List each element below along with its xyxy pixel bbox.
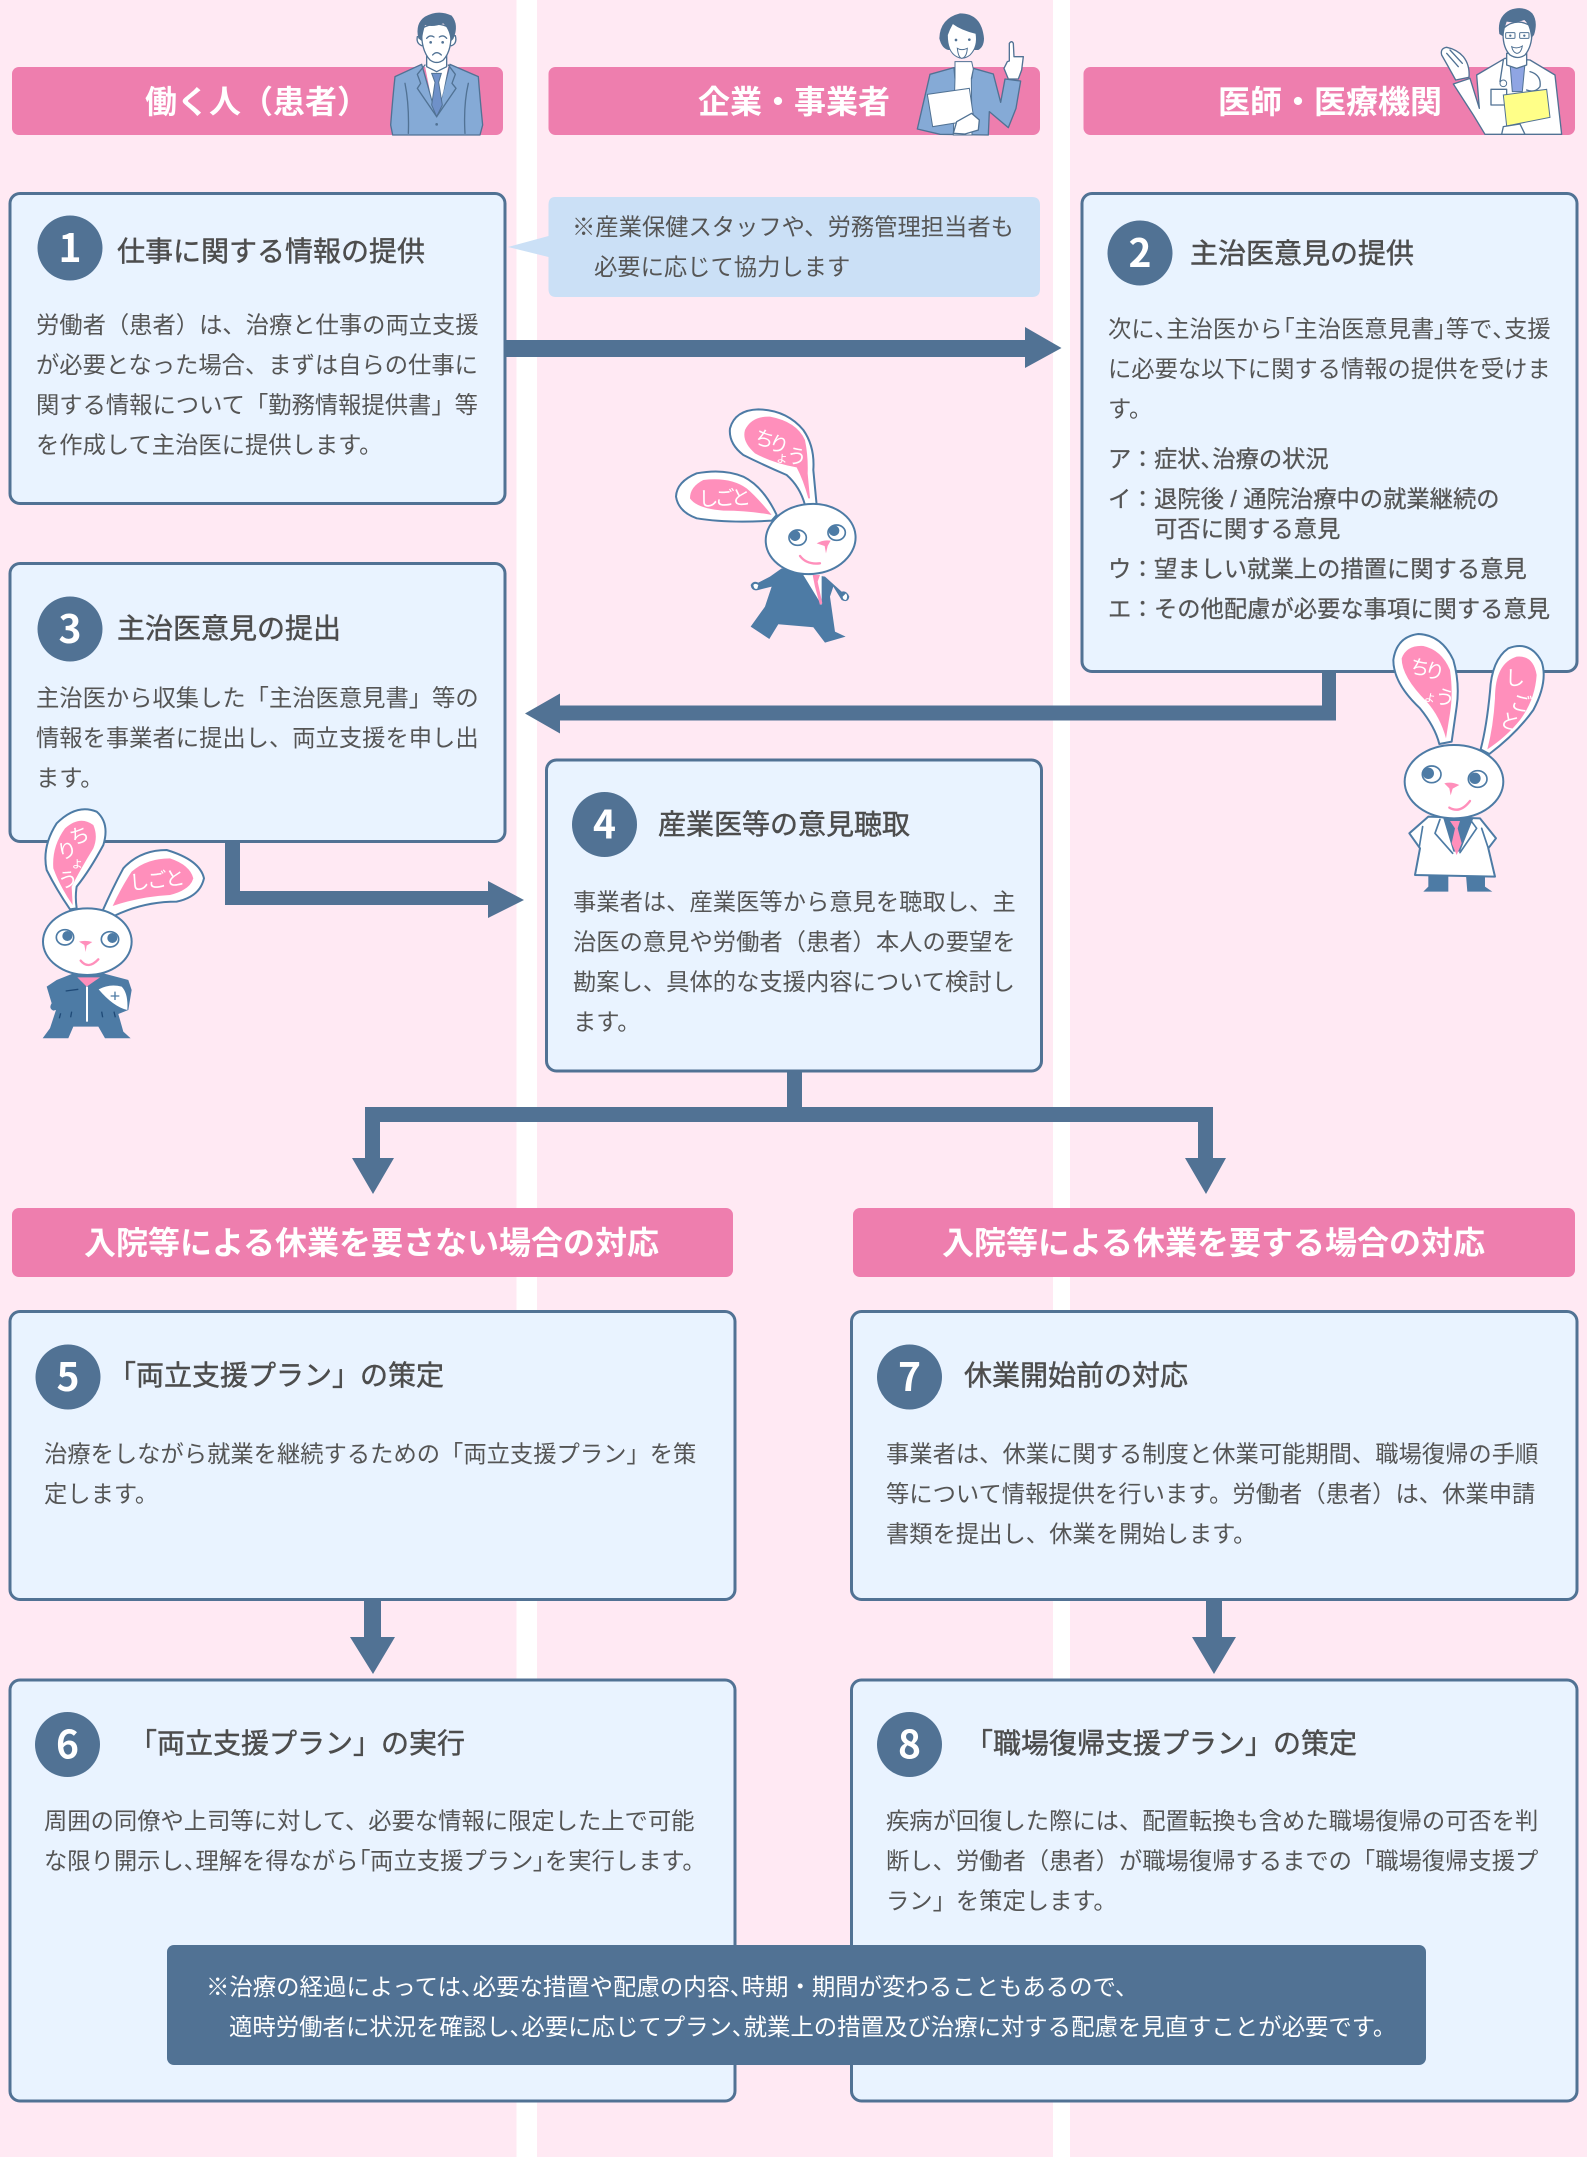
number badge 3 [38,596,102,662]
mascot: rabbit in a suit walking [676,409,859,643]
list ア〜エ: 症状、治療の状況 [1154,446,1329,472]
number badge 5 [36,1344,100,1410]
arrow: step 2 to step 3 [525,671,1336,734]
number badge 7 [877,1344,942,1410]
number badge 4: 4 [593,794,616,850]
icon: worried male employee [391,13,483,135]
note banner: 治療の経過 [167,1945,1426,2065]
panel: step 7 休業開始前の対応 [852,1312,1577,1600]
body text 7 [886,1441,1538,1547]
number badge 1: 1 [58,218,82,274]
body text 1 [36,312,479,458]
mascot: rabbit in work clothes with a helmet: う [56,868,80,893]
header: 働く人（患者）: 働く人（患者） [145,84,369,120]
body text 8: ラン」を策定します。 [886,1888,1117,1914]
number badge 6 [35,1712,100,1777]
arrow: step 5 to step 6 [350,1600,395,1674]
number badge 6: 6 [56,1714,79,1770]
body text 3: ます。 [36,765,104,791]
body text 2 [1108,316,1551,422]
header: 企業・事業者 [548,67,1040,135]
list ア〜エ [1108,446,1550,622]
body text 4: ます。 [573,1009,641,1035]
number badge 8 [877,1712,942,1777]
list ア〜エ: 退院後 / 通院治療中の就業継続の [1154,486,1500,512]
number badge 3: 3 [58,599,82,655]
heading 5: 「両立支援プラン」の策定 [108,1360,444,1391]
body text 6: 周囲の同僚や上司等に対して、必要な情報に限定した上で可能 [44,1808,694,1834]
icon: doctor holding a yellow chart [1441,8,1562,134]
list ア〜エ: ウ [1108,556,1131,582]
header: 休業を要さない場合: 入院等による休業を要さない場合の対応 [84,1225,659,1261]
list ア〜エ: ： [1131,486,1154,512]
header: 企業・事業者: 企業・事業者 [698,84,890,120]
mascot: rabbit in a lab coat: ご [1508,690,1533,717]
body text 5: 治療をしながら就業を継続するための「両立支援プラン」を策 [44,1441,696,1467]
body text 8: 疾病が回復した際には、配置転換も含めた職場復帰の可否を判 [886,1808,1538,1834]
body text 1: 関する情報について「勤務情報提供書」等 [36,392,478,418]
arrow: step 3 to step 4 [225,841,524,918]
panel: step 6 両立支援プランの実行 [10,1680,735,2101]
body text 1: が必要となった場合、まずは自らの仕事に [36,352,478,378]
callout: 産業保健スタッフ note [508,197,1040,297]
list ア〜エ: エ [1108,596,1131,622]
body text 2: す。 [1108,396,1152,422]
list ア〜エ: ア [1108,446,1131,472]
mascot: rabbit in a lab coat [1393,634,1544,892]
mascot: rabbit in a lab coat: と [1497,710,1522,736]
body text 4 [573,889,1016,1035]
heading 4: 産業医等の意見聴取 [658,809,910,840]
body text 7: 事業者は、休業に関する制度と休業可能期間、職場復帰の手順 [886,1441,1538,1467]
panel: step 4 産業医等の意見聴取 [546,760,1042,1071]
body text 3 [36,685,479,791]
header: 医師・医療機関: 医師・医療機関 [1218,84,1442,120]
header: 医師・医療機関 [1084,67,1575,135]
arrow: step 1 to step 2 [505,327,1062,368]
heading 6: 「両立支援プラン」の実行 [129,1728,465,1759]
note banner: 治療の経過: ※治療の経過によっては、必要な措置や配慮の内容、時期・期間が変わることもあるので、 [206,1974,1138,2000]
callout: 産業保健スタッフ note: 必要に応じて協力します [594,254,850,280]
arrow: branch from step 4 to both cases [352,1071,1226,1194]
body text 5: 定します。 [44,1481,158,1507]
body text 4: 治医の意見や労働者（患者）本人の要望を [573,929,1016,955]
mascot: rabbit in a suit walking: ちり [751,426,788,458]
heading 3: 主治医意見の提出 [117,613,341,644]
header: 働く人（患者） [12,67,503,135]
mascot: rabbit in work clothes with a helmet [43,809,204,1038]
body text 1: を作成して主治医に提供します。 [36,432,382,458]
heading 1: 仕事に関する情報の提供 [117,236,425,267]
body text 5 [44,1441,696,1507]
mascot: rabbit in a suit walking: ょう [775,445,806,469]
mascot: rabbit in a lab coat: し [1505,668,1525,690]
mascot: rabbit in a lab coat: ちり [1407,655,1443,685]
body text 8 [886,1808,1538,1914]
number badge 8: 8 [898,1714,921,1770]
icon: female employer pointing up [917,13,1023,135]
mascot: rabbit in a suit walking: しごと [698,486,748,511]
panel: step 1 仕事に関する情報の提供 [10,194,505,504]
header: 休業を要する場合 [853,1208,1575,1277]
header: 休業を要する場合: 入院等による休業を要する場合の対応 [942,1225,1485,1261]
body text 3: 情報を事業者に提出し、両立支援を申し出 [36,725,479,751]
heading 7: 休業開始前の対応 [964,1360,1188,1391]
number badge 2: 2 [1128,223,1152,279]
body text 1: 労働者（患者）は、治療と仕事の両立支援 [36,312,479,338]
heading 8: 「職場復帰支援プラン」の策定 [965,1728,1357,1759]
list ア〜エ: 可否に関する意見 [1154,516,1340,542]
body text 8: 断し、労働者（患者）が職場復帰するまでの「職場復帰支援プ [886,1848,1538,1874]
mascot: rabbit in work clothes with a helmet: ち [67,823,92,850]
number badge 2 [1108,220,1172,286]
heading 2: 主治医意見の提供 [1190,238,1414,269]
number badge 4 [572,792,637,857]
mascot: rabbit in work clothes with a helmet: しごと [128,866,184,895]
body text 7: 等について情報提供を行います。労働者（患者）は、休業申請 [886,1481,1535,1507]
panel: step 5 両立支援プランの策定 [10,1312,735,1600]
list ア〜エ: ： [1131,556,1154,582]
panel: step 3 主治医意見の提出 [10,564,505,842]
list ア〜エ: ： [1131,596,1154,622]
body text 2: 次に、主治医から「主治医意見書」等で、支援 [1108,316,1551,342]
panel: step 8 職場復帰支援プランの策定 [852,1680,1577,2101]
list ア〜エ: 望ましい就業上の措置に関する意見 [1154,556,1527,582]
list ア〜エ: ： [1131,446,1154,472]
body text 3: 主治医から収集した「主治医意見書」等の [36,685,479,711]
body text 7: 書類を提出し、休業を開始します。 [886,1521,1256,1547]
body text 4: 勘案し、具体的な支援内容について検討し [573,969,1015,995]
number badge 7: 7 [898,1347,921,1403]
header: 休業を要さない場合 [12,1208,733,1277]
mascot: rabbit in a lab coat: ょう [1422,683,1455,711]
arrow: step 7 to step 8 [1192,1600,1236,1674]
note banner: 治療の経過: 適時労働者に状況を確認し、必要に応じてプラン、就業上の措置及び治療に対する配慮を見直すことが必要です。 [229,2014,1396,2040]
mascot: rabbit in work clothes with a helmet: ょ [71,855,84,870]
number badge 5: 5 [56,1347,80,1403]
mascot: rabbit in work clothes with a helmet: り [55,838,80,865]
number badge 1 [38,216,102,280]
body text 4: 事業者は、産業医等から意見を聴取し、主 [573,889,1016,915]
body text 2: に必要な以下に関する情報の提供を受けま [1108,356,1551,382]
body text 6 [44,1808,706,1874]
body text 6: な限り開示し、理解を得ながら「両立支援プラン」を実行します。 [44,1848,706,1874]
list ア〜エ: イ [1108,486,1131,512]
panel: step 2 主治医意見の提供 [1082,194,1577,672]
callout: 産業保健スタッフ note: ※産業保健スタッフや、労務管理担当者も [572,214,1014,240]
list ア〜エ: その他配慮が必要な事項に関する意見 [1154,596,1550,622]
